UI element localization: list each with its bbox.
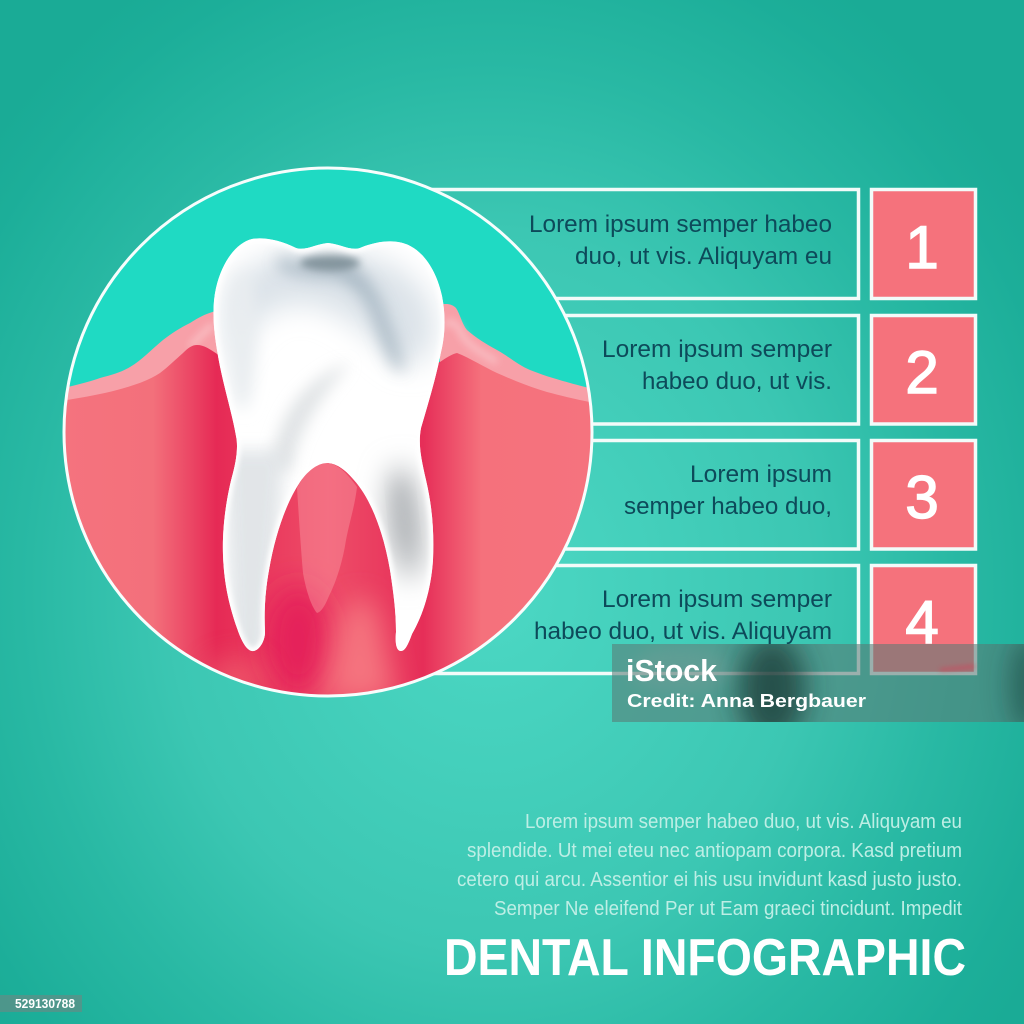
image id tag [0, 995, 82, 1012]
tooth white rim [213, 238, 445, 651]
panel: row 2 [400, 316, 858, 424]
tooth mid crease [272, 366, 343, 470]
number box 1 [872, 190, 976, 298]
watermark credit: Credit: Anna Bergbauer [627, 691, 866, 711]
row 3 text: semper habeo duo, [624, 493, 832, 520]
number box 3: 3 [905, 464, 939, 531]
row 4 outline [400, 566, 858, 674]
gum shading between roots [264, 585, 332, 695]
circle illustration: tooth in gum [50, 168, 600, 710]
number box 2: 2 [905, 339, 939, 406]
gum lower left lift [208, 651, 270, 686]
circle background [64, 168, 592, 696]
gum light streak [325, 598, 395, 700]
tooth pulp [297, 463, 357, 613]
tooth crown shadow [278, 256, 404, 372]
tooth crown dark spot [300, 255, 360, 271]
watermark blotches [634, 644, 1024, 722]
gum highlight band [68, 304, 589, 402]
row 1 outline [400, 190, 858, 298]
gum highlight streaks [190, 322, 497, 362]
row 2 text: habeo duo, ut vis. [642, 368, 832, 395]
gums [50, 304, 600, 710]
body paragraph: Semper Ne eleifend Per ut Eam graeci tincidunt. Impedit [494, 897, 962, 920]
number box 4 [872, 566, 976, 674]
left root tint [225, 450, 285, 660]
image id tag: 529130788 [15, 997, 75, 1011]
row 4 text: Lorem ipsum semper [602, 586, 832, 613]
row 3 outline [400, 440, 858, 549]
row 4 text: habeo duo, ut vis. Aliquyam [534, 618, 832, 645]
watermark logo: iStock [626, 653, 718, 688]
watermark banner [612, 644, 1024, 722]
number box 2 [872, 316, 976, 424]
circle outline [64, 168, 592, 696]
number box 3 [872, 440, 976, 549]
row 2 text: Lorem ipsum semper [602, 336, 832, 363]
tooth upper wash [228, 252, 435, 380]
right root shadow [382, 463, 428, 581]
row 3 text: Lorem ipsum [690, 461, 832, 488]
body paragraph: Lorem ipsum semper habeo duo, ut vis. Aliquyam eu [525, 810, 962, 833]
body paragraph: splendide. Ut mei eteu nec antiopam corpora. Kasd pretium [467, 839, 962, 862]
row 2 outline [400, 316, 858, 424]
number box 1: 1 [905, 214, 939, 281]
panel: row 3 [400, 440, 858, 549]
tooth left wash [228, 340, 257, 405]
panel: row 4 [400, 566, 858, 674]
row 1 text: Lorem ipsum semper habeo [529, 211, 832, 238]
gum body [50, 345, 600, 710]
right root core shade [391, 480, 415, 550]
title: DENTAL INFOGRAPHIC [444, 929, 966, 987]
number box 4: 4 [905, 589, 939, 656]
panel: row 1 [400, 190, 858, 298]
row 1 text: duo, ut vis. Aliquyam eu [575, 243, 832, 270]
tooth [213, 238, 445, 660]
body paragraph: cetero qui arcu. Assentior ei his usu invidunt kasd justo justo. [457, 868, 962, 891]
